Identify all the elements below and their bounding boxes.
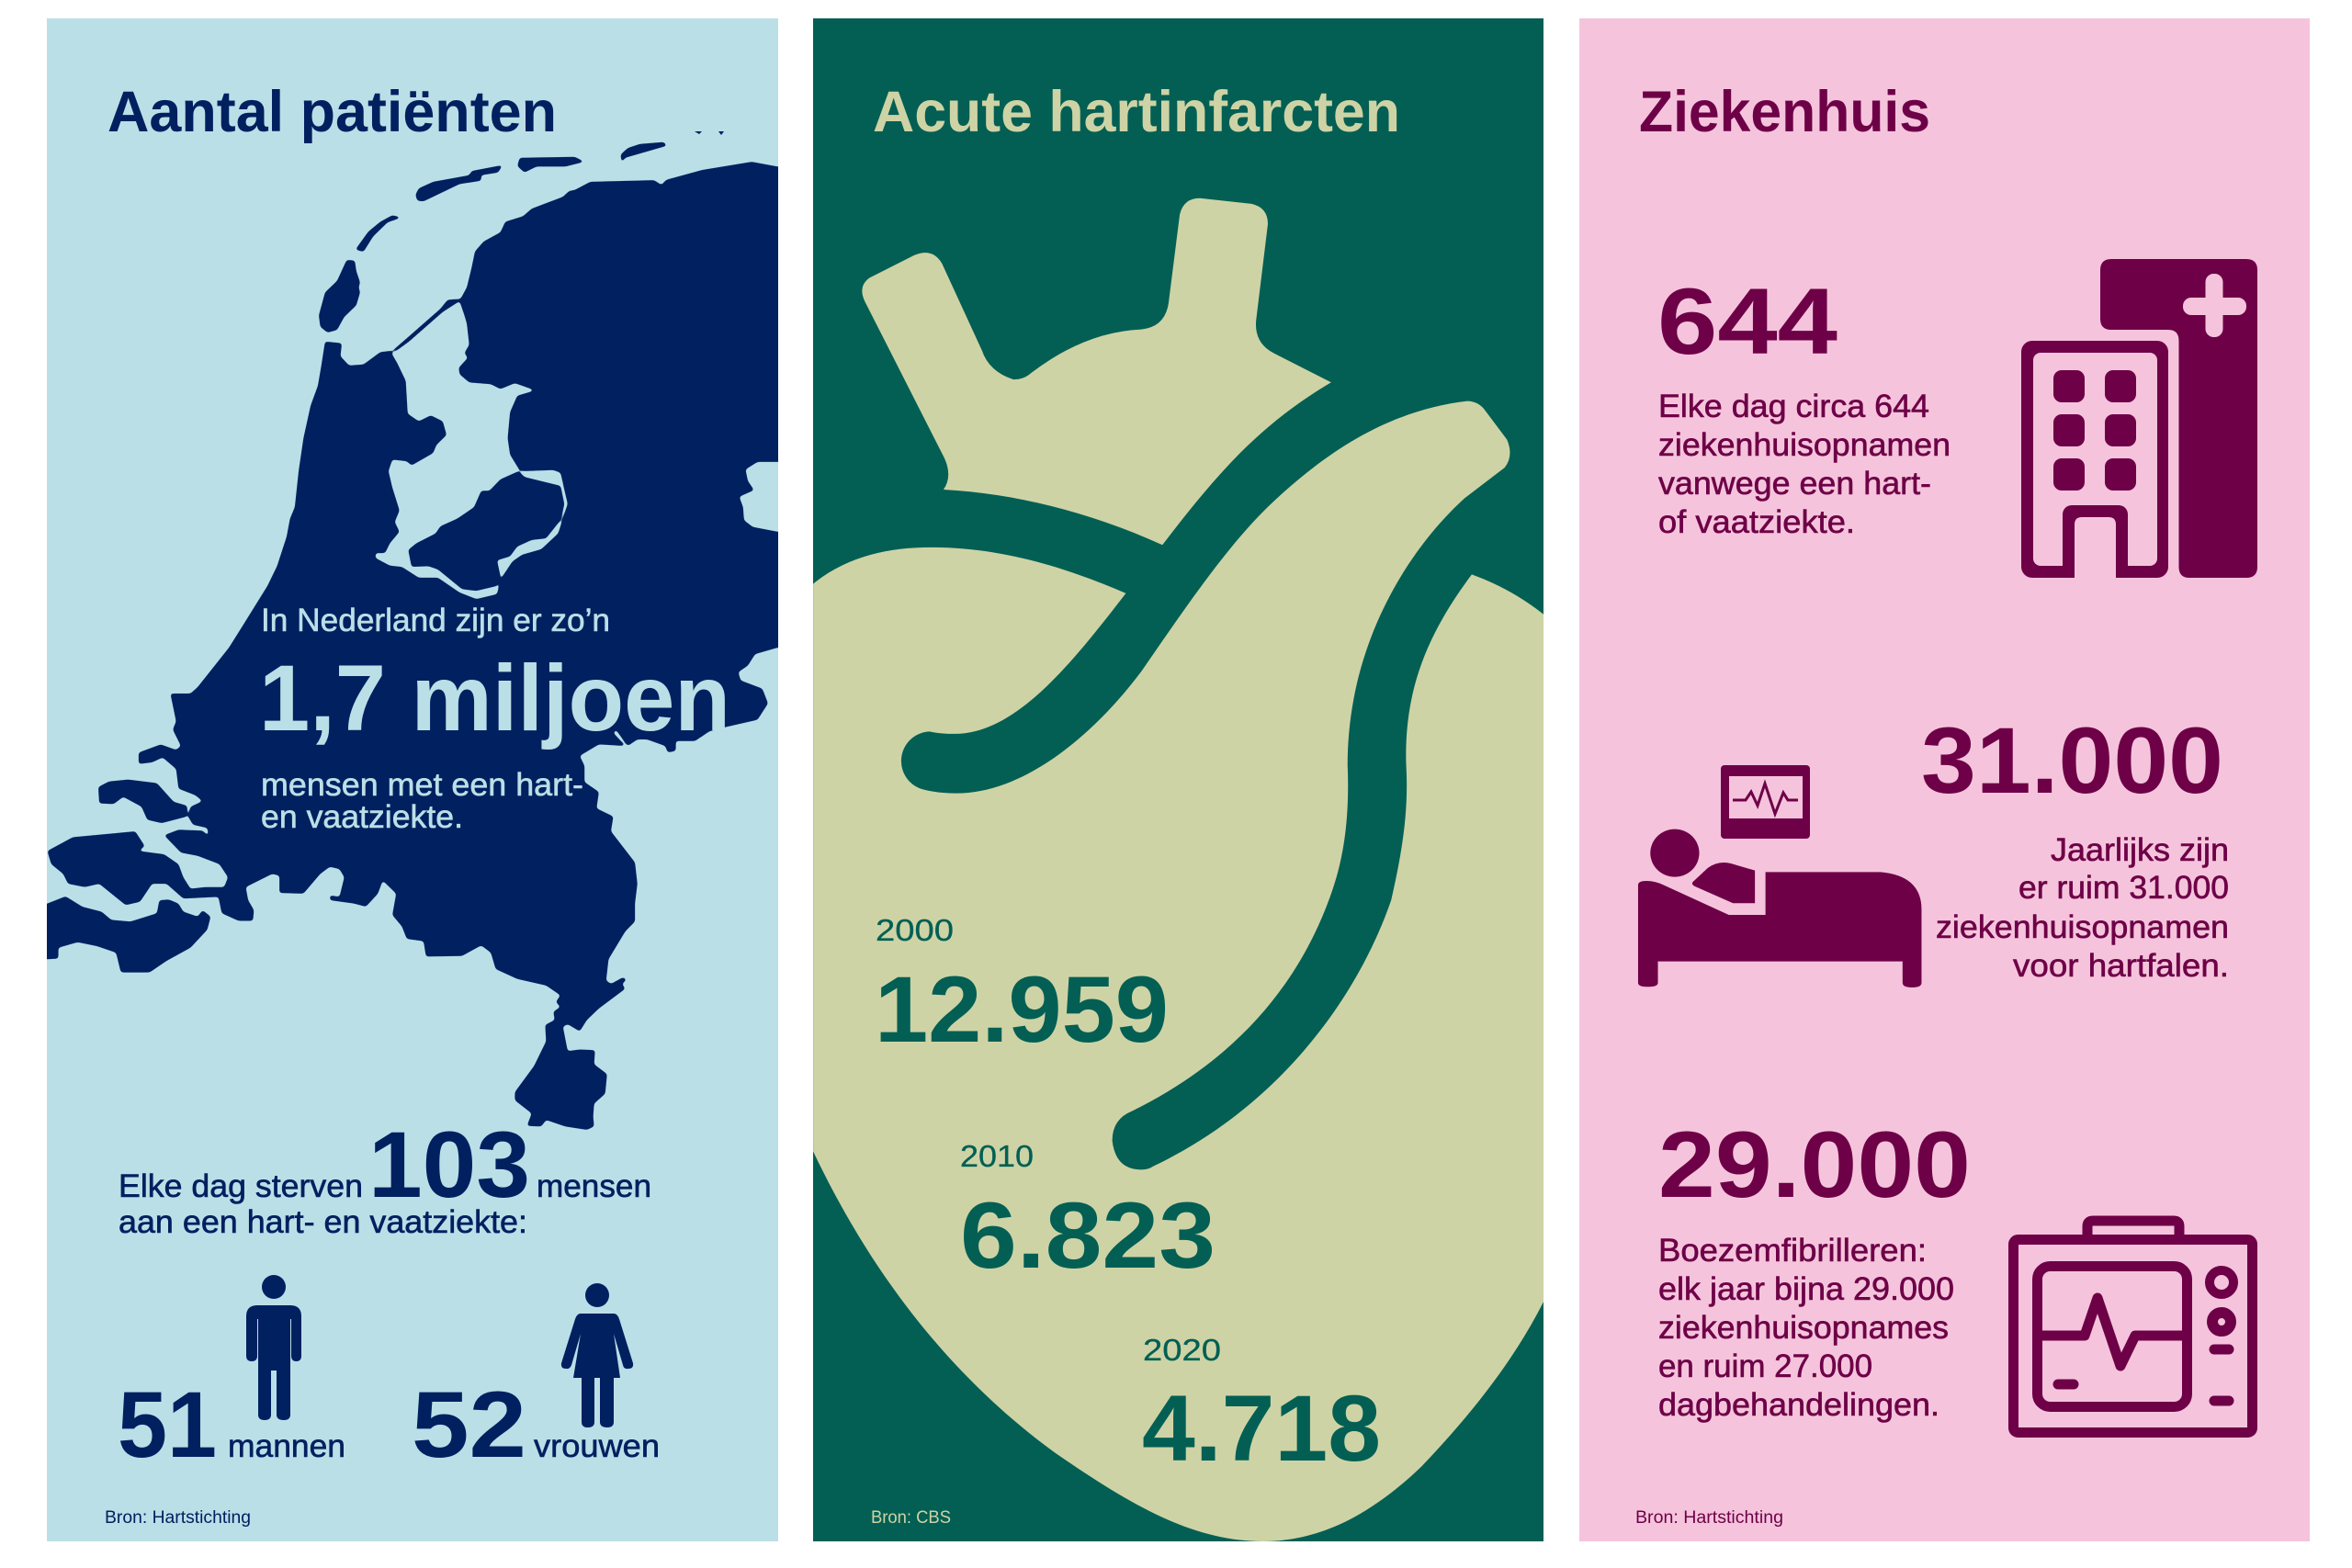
stat: 52 vrouwen: vrouwen	[534, 1428, 660, 1464]
text: 29.000 description: ziekenhuisopnames	[1658, 1310, 1949, 1346]
stat: 2010	[960, 1139, 1216, 1288]
text: 644 description: vanwege een hart-	[1658, 466, 1931, 502]
text: elke dag sterven 103 mensen: Elke dag sterven	[119, 1168, 363, 1204]
source: Bron: Hartstichting	[1635, 1508, 1783, 1528]
icon: man	[246, 1275, 301, 1420]
text: mensen met een hart- en vaatziekte: mensen met een hart-	[261, 767, 583, 803]
stat: 51 mannen	[118, 1372, 345, 1477]
stat: 31.000: 31.000	[1921, 708, 2223, 813]
illustration: heart	[813, 198, 1544, 1541]
stat: 2010: 2010	[960, 1139, 1034, 1173]
stat: 51 mannen: mannen	[228, 1428, 345, 1464]
stat: 644: 644	[1657, 269, 1838, 374]
stat: 2020: 2020	[1143, 1333, 1221, 1367]
icon: woman	[561, 1283, 633, 1427]
text: 29.000 description: elk jaar bijna 29.000	[1658, 1271, 1954, 1307]
text: 29.000 description: Boezemfibrilleren:	[1658, 1233, 1927, 1269]
stat: 2020	[1142, 1333, 1381, 1481]
text: mensen met een hart- en vaatziekte: en vaatziekte.	[261, 799, 463, 835]
text: 644 description: of vaatziekte.	[1658, 504, 1855, 540]
text: 29.000 description: dagbehandelingen.	[1658, 1387, 1939, 1423]
text: elke dag sterven 103 mensen: mensen	[537, 1168, 651, 1204]
stat: 2000	[875, 913, 1169, 1062]
title: Acute hartinfarcten	[873, 80, 1400, 144]
text: 31.000 description: ziekenhuisopnamen	[1936, 909, 2229, 945]
text: 644 description: ziekenhuisopnamen	[1658, 427, 1951, 463]
source: Bron: Hartstichting	[105, 1508, 251, 1528]
text: 29.000 description: en ruim 27.000	[1658, 1348, 1872, 1384]
stat: 51 mannen: 51	[118, 1372, 217, 1477]
panel: ziekenhuis	[1579, 18, 2310, 1541]
icon: patient in bed with monitor	[1638, 765, 1921, 987]
map of the Netherlands	[37, 131, 786, 1130]
stat: 2020: 4.718	[1142, 1376, 1381, 1481]
text: elke dag sterven 103 mensen: 103	[368, 1112, 530, 1217]
text: 31.000 description	[1936, 832, 2229, 984]
stat: 29.000: 29.000	[1658, 1112, 1971, 1217]
stat: 2010: 6.823	[960, 1183, 1216, 1288]
text: 644 description	[1658, 389, 1951, 540]
text: 31.000 description: er ruim 31.000	[2018, 870, 2229, 906]
text: elke dag sterven 103 mensen	[119, 1112, 651, 1240]
text: elke dag sterven 103 mensen: aan een hart- en vaatziekte:	[119, 1204, 527, 1240]
stat: 2000: 12.959	[875, 957, 1169, 1062]
panel: aantal patiënten	[37, 18, 786, 1541]
text: 31.000 description: Jaarlijks zijn	[2051, 832, 2229, 868]
stat: 52 vrouwen: 52	[412, 1372, 526, 1477]
panel: acute hartinfarcten	[813, 18, 1544, 1541]
icon: hospital	[2021, 259, 2257, 579]
stat: 2000: 2000	[876, 913, 954, 947]
title: Aantal patiënten	[107, 80, 557, 144]
text: 29.000 description	[1658, 1233, 1954, 1423]
icon: heart monitor	[2014, 1221, 2253, 1433]
source: Bron: CBS	[871, 1508, 951, 1528]
text: 31.000 description: voor hartfalen.	[2013, 948, 2229, 984]
title: Ziekenhuis	[1639, 80, 1930, 144]
big number: 1,7 miljoen: 1,7 miljoen	[259, 646, 730, 750]
text: intro: In Nederland zijn er zo’n	[261, 603, 610, 638]
text: mensen met een hart- en vaatziekte	[261, 767, 583, 835]
text: 644 description: Elke dag circa 644	[1658, 389, 1929, 424]
stat: 52 vrouwen	[412, 1372, 660, 1477]
